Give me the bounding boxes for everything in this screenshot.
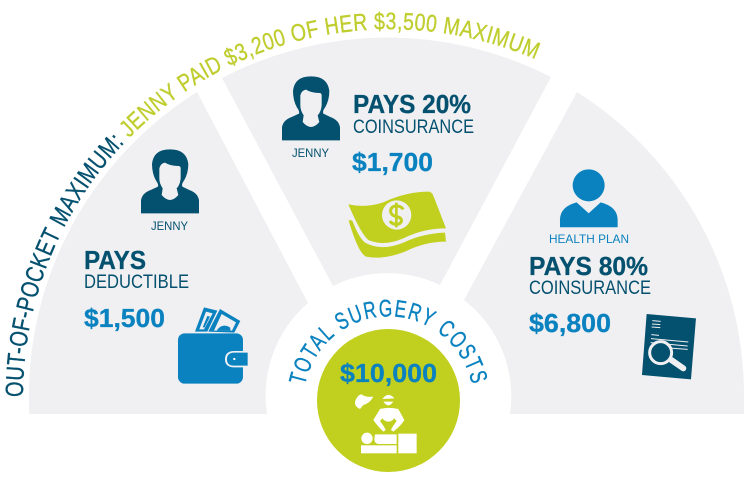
curved title: out-of-pocket maximum bbox=[5, 12, 540, 396]
heading: pays: PAYS bbox=[84, 245, 146, 275]
icon: wallet with money bbox=[178, 307, 248, 384]
label: Jenny: JENNY bbox=[151, 219, 188, 233]
label: deductible: DEDUCTIBLE bbox=[84, 272, 189, 293]
heading: pays 80%: PAYS 80% bbox=[529, 251, 648, 281]
icon: Jenny bbox=[282, 76, 340, 140]
icon: dollar bills bbox=[348, 192, 446, 258]
panel: deductible bbox=[29, 92, 308, 414]
label: coinsurance: COINSURANCE bbox=[353, 117, 474, 138]
label: Jenny: JENNY bbox=[292, 146, 329, 160]
label: health plan: HEALTH PLAN bbox=[549, 232, 629, 246]
amount: $6,800: $6,800 bbox=[529, 308, 611, 338]
heading: pays 20%: PAYS 20% bbox=[353, 89, 471, 119]
label: coinsurance: COINSURANCE bbox=[529, 278, 651, 299]
icon: health plan person bbox=[560, 169, 618, 227]
out-of-pocket label: OUT-OF-POCKET MAXIMUM: bbox=[5, 134, 124, 396]
amount: $10,000: $10,000 bbox=[340, 358, 437, 388]
icon: document with magnifier bbox=[642, 314, 696, 379]
icon: Jenny bbox=[141, 149, 199, 213]
panel: coinsurance 20% bbox=[222, 38, 551, 286]
amount: $1,700: $1,700 bbox=[352, 147, 433, 177]
panel: coinsurance 80% bbox=[464, 92, 744, 414]
icon: surgeon and patient bbox=[355, 394, 417, 453]
amount: $1,500: $1,500 bbox=[84, 303, 165, 333]
curved title: total surgery costs: TOTAL SURGERY COSTS bbox=[288, 300, 488, 383]
Jenny paid label: JENNY PAID $3,200 OF HER $3,500 MAXIMUM bbox=[120, 12, 540, 136]
total circle bbox=[317, 329, 460, 472]
